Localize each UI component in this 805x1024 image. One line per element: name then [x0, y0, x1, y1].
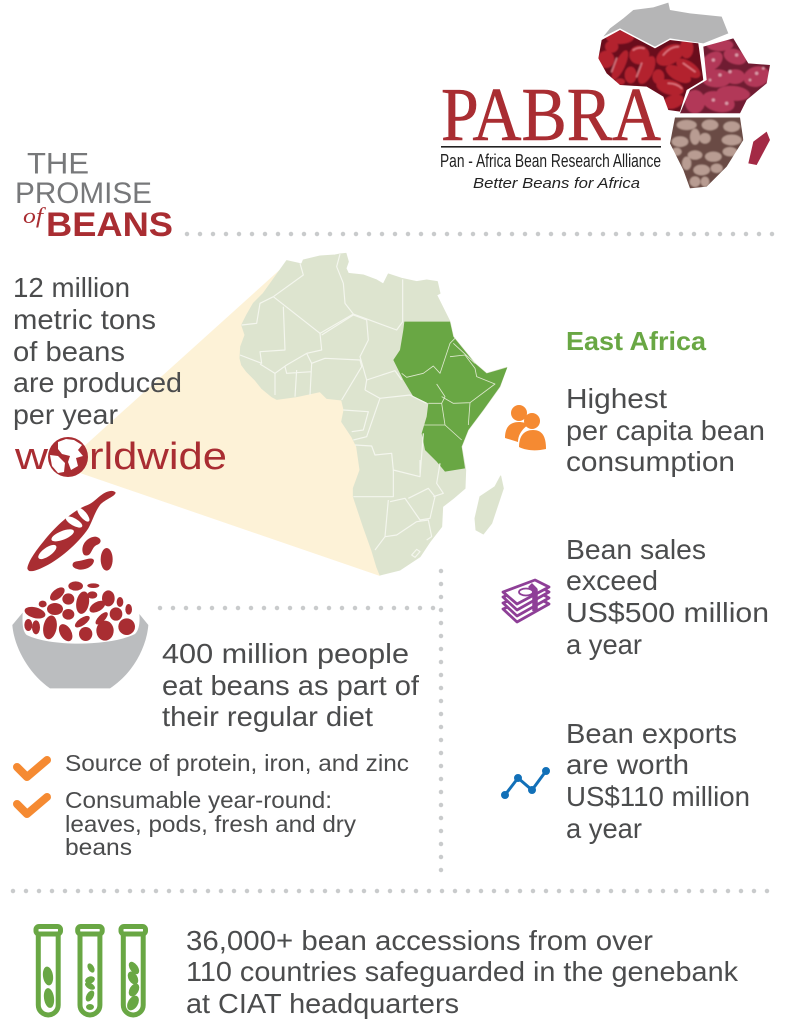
logo: rule [441, 146, 661, 148]
title: BEANS: BEANS [46, 206, 173, 244]
logo: west region beans [597, 27, 707, 113]
title: of: of [23, 203, 46, 228]
heading: East Africa: East Africa [566, 326, 707, 356]
icon: test tube 2 [78, 926, 102, 1015]
map: East Africa region [393, 322, 507, 472]
text: rldwide: rldwide [89, 436, 227, 478]
text: global production: of beans [13, 336, 125, 367]
text: per capita consumption [566, 383, 765, 477]
text: global production: per year [13, 399, 118, 430]
icon: beans in bowl [23, 581, 135, 644]
icon: bean pod and falling beans [27, 491, 116, 571]
text: 400 million people: eat beans as part of [162, 670, 419, 701]
dotted divider: top [187, 232, 775, 236]
text: consumable year-round [65, 787, 357, 860]
map highlight wedge [80, 265, 420, 576]
text: 400 million people: their regular diet [162, 701, 373, 732]
text: 400 million people [162, 638, 419, 732]
text: bean sales [566, 534, 769, 660]
icon: test tube 1 [36, 926, 60, 1015]
icon: check mark 1 [17, 760, 47, 777]
map: East Africa borders [402, 338, 495, 440]
text: bean exports [566, 718, 750, 844]
text: bean exports: a year [566, 813, 642, 844]
map: Africa landmass [240, 253, 507, 575]
text: bean sales: exceed [566, 565, 658, 596]
icon: people [505, 405, 546, 450]
dotted divider: vertical [439, 571, 443, 882]
text: bean exports: US$110 million [566, 781, 750, 812]
title: The Promise of Beans [15, 148, 173, 244]
text: bean sales: a year [566, 629, 642, 660]
map: Africa with East Africa highlighted [240, 253, 507, 575]
icon: pod [27, 491, 116, 571]
text: per capita consumption: Highest [566, 383, 667, 414]
logo: full name: Pan - Africa Bean Research Alliance [440, 151, 661, 171]
logo: Madagascar [748, 132, 770, 165]
logo: Africa of beans [597, 3, 773, 190]
map: Madagascar [475, 476, 503, 534]
logo: tagline: Better Beans for Africa [473, 175, 640, 192]
text: source of nutrients: Source of protein, iron, and zinc [65, 750, 409, 776]
text: genebank: 36,000+ bean accessions from over [186, 925, 653, 956]
dotted divider: bottom [13, 889, 770, 893]
logo: south region beans [668, 117, 747, 190]
text: consumable year-round: leaves, pods, fresh and dry [65, 811, 357, 837]
icon: test tubes with beans [36, 926, 146, 1015]
text: genebank [186, 925, 739, 1019]
text: bean sales: US$500 million [566, 597, 769, 628]
text: bean sales: Bean sales [566, 534, 706, 565]
map: country borders [240, 254, 443, 557]
text: bean exports: Bean exports [566, 718, 737, 749]
text: bean exports: are worth [566, 749, 689, 780]
text: consumable year-round: beans [65, 834, 132, 860]
text: genebank: 110 countries safeguarded in the genebank [186, 956, 739, 987]
icon: check mark 2 [17, 797, 47, 814]
title: THE: THE [27, 148, 89, 180]
text: per capita consumption: per capita bean [566, 415, 765, 446]
text: global production: 12 million [13, 272, 130, 303]
text: w: w [14, 436, 49, 478]
dotted divider: middle horizontal [160, 606, 436, 610]
title: PROMISE: PROMISE [15, 177, 152, 210]
text: global production: are produced [13, 367, 182, 398]
icon: bowl [12, 613, 148, 688]
logo: east region beans [680, 38, 770, 114]
text: per capita consumption: consumption [566, 446, 735, 477]
logo: PABRA wordmark: PABRA [441, 73, 661, 157]
icon: bowl of beans [12, 581, 148, 688]
text: global production: metric tons [13, 304, 156, 335]
icon: test tube 3 [121, 926, 146, 1015]
icon: stack of money [503, 580, 549, 622]
text: global production [13, 272, 182, 430]
text: consumable year-round: Consumable year-round: [65, 787, 332, 813]
text: 400 million people: 400 million people [162, 638, 409, 669]
logo: PABRA [440, 3, 773, 192]
text: genebank: at CIAT headquarters [186, 988, 459, 1019]
icon: falling beans [73, 537, 113, 571]
logo: grey north region [603, 3, 728, 47]
icon: globe [48, 437, 88, 477]
icon: line chart [502, 768, 550, 798]
worldwide wordmark with globe [14, 436, 227, 478]
